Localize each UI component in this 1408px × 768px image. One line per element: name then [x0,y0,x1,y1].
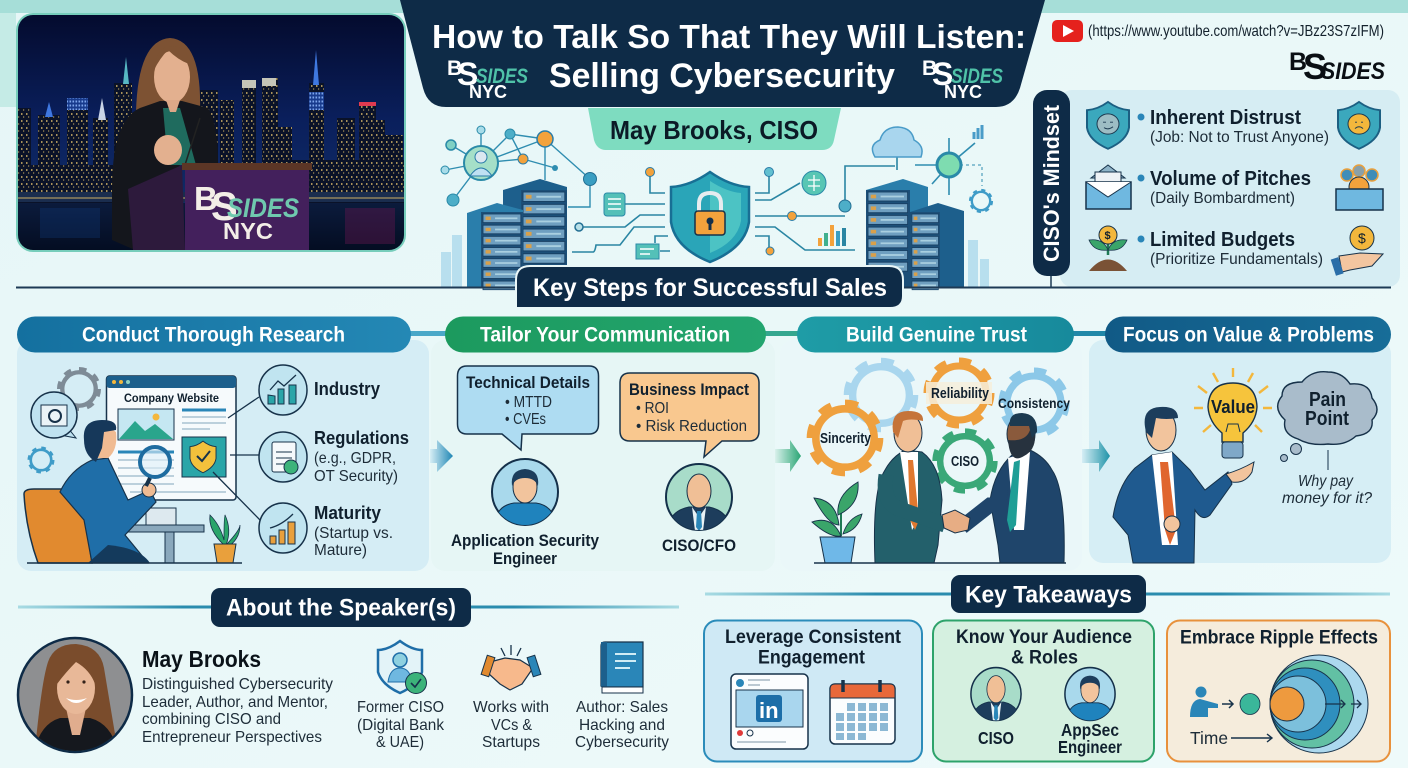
title banner [400,0,1045,107]
card: embrace ripple effects: Embrace Ripple Effects [1180,626,1378,648]
icon: linkedin post: in [759,698,779,723]
top colour band [0,0,1408,107]
question text: Why pay [1298,473,1354,490]
credential: author: Hacking and [579,717,665,734]
heading: Key Takeaways [965,582,1132,608]
gear: consistency: Consistency [998,396,1070,411]
credential: works with vcs: Startups [482,734,540,751]
person at screen [60,420,156,563]
logo: BSides NYC left: S [457,56,478,92]
speech bubble: technical details [458,366,598,450]
logo: BSides NYC right: S [932,56,953,92]
credential: former ciso: Former CISO [357,699,444,716]
header: Conduct Thorough Research [82,322,345,346]
item: maturity: Mature) [314,542,367,559]
credential: author: Cybersecurity [575,734,669,751]
icon: person and ripple source [1190,686,1260,717]
time axis [1190,728,1272,748]
cloud: pain point [1278,372,1377,444]
thought bubbles [1280,444,1328,470]
section: key takeaways [704,575,1390,762]
logo: BSides NYC left: SIDES [476,65,528,88]
handshake [942,510,970,533]
credential: works with vcs: VCs & [491,717,532,734]
browser: company website: Company Website [124,391,219,405]
arrow: tailor to trust [775,440,801,472]
cloud [872,127,922,157]
section: about the speaker [18,588,679,752]
item: maturity: Maturity [314,502,382,523]
logo: BSides NYC left: B [447,57,462,80]
speech bubble: business impact [620,373,759,457]
item: inherent distrust [1087,102,1380,149]
logo: BSides NYC right: NYC [944,82,982,102]
item: volume of pitches [1086,165,1383,210]
speech bubble: business impact: • ROI [636,400,669,417]
avatar: ciso [971,668,1021,721]
portrait [18,638,132,752]
lightbulb: value [1194,368,1272,458]
left network graph [441,126,596,207]
man presenting [1113,407,1254,563]
credential: works with vcs: Works with [473,699,549,716]
servers left [467,179,567,290]
icon: worried shield [1338,102,1380,149]
plant [210,515,240,563]
item: industry: Industry [314,378,381,399]
desk and laptop [110,508,204,563]
icon: coin in hand [1331,226,1383,276]
header: Build Genuine Trust [846,322,1027,346]
gear: reliability: Reliability [931,386,989,402]
item: limited budgets [1089,226,1383,276]
arrow: trust to value [1082,440,1110,472]
card: know your audience: CISO [978,728,1014,748]
icon: grey gear [59,369,99,409]
item: inherent distrust: (Job: Not to Trust Anyone) [1150,129,1329,146]
step 2: tailor your communication [445,316,766,568]
logo: BSides black: S [1303,46,1327,87]
icon: calendar [830,680,895,744]
heading: About the Speaker(s) [226,594,456,622]
question text: money for it? [1282,490,1372,507]
item: maturity: (Startup vs. [314,525,393,542]
avatar: appsec engineer [1065,668,1115,721]
icon: youtube [1052,20,1083,42]
credential: former ciso [357,641,445,751]
woman [136,38,200,110]
avatar: ciso cfo [666,464,732,531]
browser: company website [106,376,236,500]
servers right [866,179,964,290]
photo: speaker at podium with New York skyline: NYC [223,218,273,244]
logo: BSides black: B [1289,48,1307,76]
item: volume of pitches: Volume of Pitches [1150,167,1311,190]
card: know your audience [933,620,1154,762]
speech bubble: technical details: • CVEs [505,411,546,428]
illustration: network, servers and shield [441,125,992,290]
speech bubble: business impact: Business Impact [629,380,749,399]
photo: speaker at podium with New York skyline [16,13,406,252]
connector lines [213,397,260,520]
mindset label pill [1033,90,1070,288]
item: inherent distrust: Inherent Distrust [1150,106,1301,129]
icon: people box [1336,165,1383,210]
speech bubble: technical details: • MTTD [505,394,552,411]
header [797,316,1074,352]
credential: author [575,642,669,751]
cloud: pain point: Pain [1309,389,1346,411]
header [17,316,411,352]
chair [24,489,92,563]
cloud: pain point: Point [1305,408,1349,430]
speech bubble: technical details: Technical Details [466,373,590,392]
label: application security engineer: Application Security [451,531,599,550]
logo: BSides NYC right: SIDES [951,65,1003,88]
man left [874,411,945,563]
lightbulb: value: Value [1211,397,1255,417]
item: regulations [259,427,409,485]
credential: former ciso: & UAE) [376,734,424,751]
icon: money plant [1089,226,1127,271]
mindset label pill: CISO's Mindset [1039,104,1064,262]
gear: sincerity [810,403,880,473]
gear: consistency [998,370,1070,436]
header: Focus on Value & Problems [1123,322,1374,346]
item: regulations: (e.g., GDPR, [314,450,396,467]
item: volume of pitches: (Daily Bombardment) [1150,190,1295,207]
card: leverage consistent engagement: Leverage Consistent [725,627,902,648]
speaker name tab [588,108,841,150]
gear: ciso [935,431,995,491]
credential: former ciso: (Digital Bank [357,717,445,734]
icon: mask shield [1087,102,1129,149]
plant [812,482,862,563]
title text line 1: How to Talk So That They Will Listen: [432,19,1026,56]
arrow: research to tailor [430,440,453,472]
bio [142,646,333,746]
item: regulations: OT Security) [314,468,398,485]
label: ciso cfo: CISO/CFO [662,536,736,555]
icon: coin in hand: $ [1358,230,1366,246]
step 1: conduct thorough research [17,316,411,563]
heading [951,575,1146,613]
horizontal section rule [16,286,1391,288]
header [1105,316,1391,352]
avatar: application security engineer [492,459,558,526]
youtube link [1052,20,1384,42]
bio: Entrepreneur Perspectives [142,729,322,746]
gear: ciso: CISO [951,454,979,470]
logo: BSides NYC right [922,56,1003,102]
logo: BSides NYC left [447,56,528,102]
panel: CISO's mindset [1033,90,1400,288]
header [445,316,766,352]
icon: gear [970,190,992,212]
icon: search bubble [31,392,77,438]
icon: pale gear [847,361,915,429]
title text line 2: Selling Cybersecurity [549,57,895,95]
icon: linkedin post [731,674,808,749]
bio: Leader, Author, and Mentor, [142,694,328,711]
hub node [915,125,982,195]
label: appsec engineer: AppSec [1061,720,1119,740]
bar chart [818,225,846,246]
speech bubble: business impact: • Risk Reduction [636,418,747,435]
question text [1282,473,1372,507]
icon: small blue gear [29,448,53,472]
credential: works with vcs [473,645,549,751]
connectors between step headers [405,331,1110,336]
item: limited budgets: Limited Budgets [1150,228,1295,251]
time axis: Time [1190,728,1228,748]
label: appsec engineer [1058,720,1122,757]
man right [962,413,1064,563]
step 4: focus on value and problems [1105,316,1391,563]
photo: speaker at podium with New York skyline: SIDES [227,193,299,223]
item: regulations: Regulations [314,427,409,448]
bio: May Brooks [142,646,261,672]
photo: speaker at podium with New York skyline: B [194,180,218,217]
icon: central shield with lock [671,172,749,262]
bio: combining CISO and [142,711,281,728]
circuit lines [572,157,897,252]
step 3: build genuine trust [797,316,1074,563]
heading [211,588,471,627]
photo: speaker at podium with New York skyline: S [211,185,238,229]
item: limited budgets: (Prioritize Fundamentals) [1150,251,1323,268]
logo: BSides NYC left: NYC [469,82,507,102]
card: know your audience: & Roles [1011,648,1078,668]
gear: sincerity: Sincerity [820,431,871,447]
icon: envelope [1086,165,1131,209]
label: application security engineer [451,531,599,568]
heading: key steps: Key Steps for Successful Sales [533,274,887,302]
card: leverage consistent engagement: Engagement [758,648,866,668]
speaker name tab: May Brooks, CISO [610,115,818,145]
card: leverage consistent engagement [704,620,922,762]
logo: BSides black [1289,46,1385,87]
bio: Distinguished Cybersecurity [142,676,333,693]
panel backgrounds [17,340,1391,571]
heading: key steps [516,266,903,308]
card: know your audience: Know Your Audience [956,627,1132,648]
logo: BSides NYC right: B [922,57,937,80]
header: Tailor Your Communication [480,322,730,346]
ripple circles [1270,655,1368,753]
card: embrace ripple effects [1167,620,1390,762]
city bars [441,235,989,287]
credential: author: Author: Sales [576,699,668,716]
magnifier [140,447,170,486]
label: appsec engineer: Engineer [1058,737,1122,757]
item: maturity [259,502,393,559]
item: industry [259,365,381,415]
logo: BSides black: SIDES [1321,58,1385,85]
podium [128,165,185,250]
icon: money plant: $ [1104,230,1111,242]
gear: reliability [926,360,992,426]
label: application security engineer: Engineer [493,549,557,568]
